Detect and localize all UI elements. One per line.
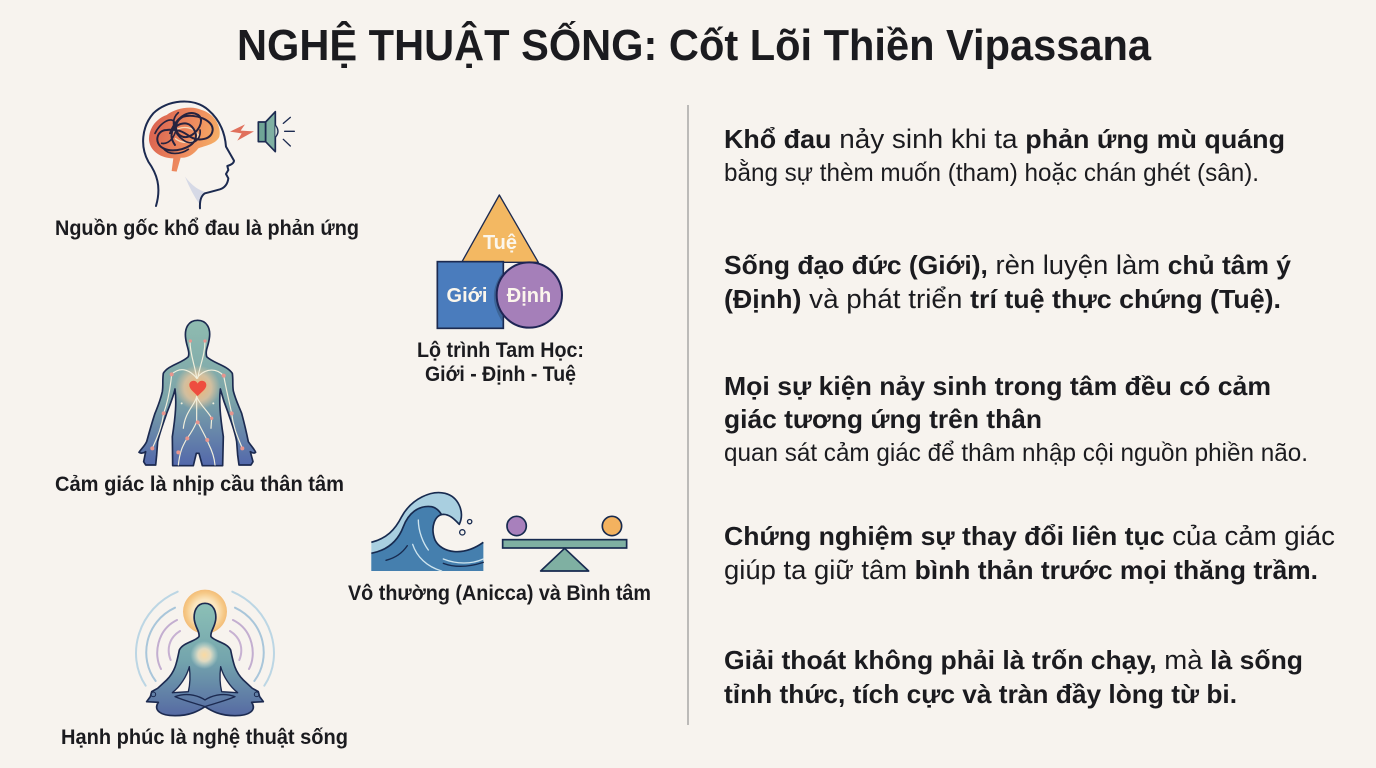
text block: liberation: Giải thoát không phải là trốn chạy, mà là sống xyxy=(724,645,1303,675)
text block: sensations: giác tương ứng trên thân xyxy=(724,404,1042,434)
icon: wave xyxy=(371,493,483,571)
label: Lộ trình Tam Học: xyxy=(417,339,584,362)
text block: sensations xyxy=(724,371,1308,467)
text block: three trainings: Sống đạo đức (Giới), rèn luyện làm chủ tâm ý xyxy=(724,250,1292,280)
divider xyxy=(687,105,689,725)
icon: body with glowing heart and nerves xyxy=(139,320,256,466)
label: Cảm giác là nhịp cầu thân tâm xyxy=(55,473,344,496)
icon: triangle, square and circle xyxy=(437,195,562,328)
item: impermanence and equanimity xyxy=(348,493,651,605)
text block: impermanence: giúp ta giữ tâm bình thản trước mọi thăng trầm. xyxy=(724,555,1318,585)
text block: three trainings xyxy=(724,250,1292,314)
item: origin of suffering xyxy=(55,102,359,240)
label: Vô thường (Anicca) và Bình tâm xyxy=(348,582,651,605)
text block: three trainings: (Định) và phát triển trí tuệ thực chứng (Tuệ). xyxy=(724,284,1281,314)
text block: sensations: Mọi sự kiện nảy sinh trong tâm đều có cảm xyxy=(724,371,1271,401)
icon: head with tangled brain and speaker xyxy=(143,102,294,208)
label xyxy=(417,339,584,386)
icon: balance scale xyxy=(503,516,627,571)
text block: suffering xyxy=(724,124,1285,187)
text block: suffering: bằng sự thèm muốn (tham) hoặc chán ghét (sân). xyxy=(724,158,1259,187)
label: Tuệ: Tuệ xyxy=(483,232,517,254)
title: NGHỆ THUẬT SỐNG: Cốt Lõi Thiền Vipassana xyxy=(237,19,1151,70)
text block: liberation: tỉnh thức, tích cực và tràn đầy lòng từ bi. xyxy=(724,679,1237,709)
item: sensation bridge xyxy=(55,320,344,496)
label: Hạnh phúc là nghệ thuật sống xyxy=(61,726,348,749)
panel: right text xyxy=(724,124,1335,709)
label: Định: Định xyxy=(507,285,551,307)
item: happiness xyxy=(61,590,348,749)
label: Giới: Giới xyxy=(447,285,487,307)
text block: impermanence: Chứng nghiệm sự thay đổi liên tục của cảm giác xyxy=(724,521,1335,551)
text block: sensations: quan sát cảm giác để thâm nhập cội nguồn phiền não. xyxy=(724,439,1308,467)
text block: impermanence xyxy=(724,521,1335,585)
panel: left icons xyxy=(55,102,651,749)
label: Giới - Định - Tuệ xyxy=(425,363,576,386)
icon: meditating figure with halo xyxy=(136,590,274,716)
item: three trainings xyxy=(417,195,584,386)
label: Nguồn gốc khổ đau là phản ứng xyxy=(55,217,359,240)
text block: suffering: Khổ đau nảy sinh khi ta phản ứng mù quáng xyxy=(724,124,1285,154)
text block: liberation xyxy=(724,645,1303,709)
